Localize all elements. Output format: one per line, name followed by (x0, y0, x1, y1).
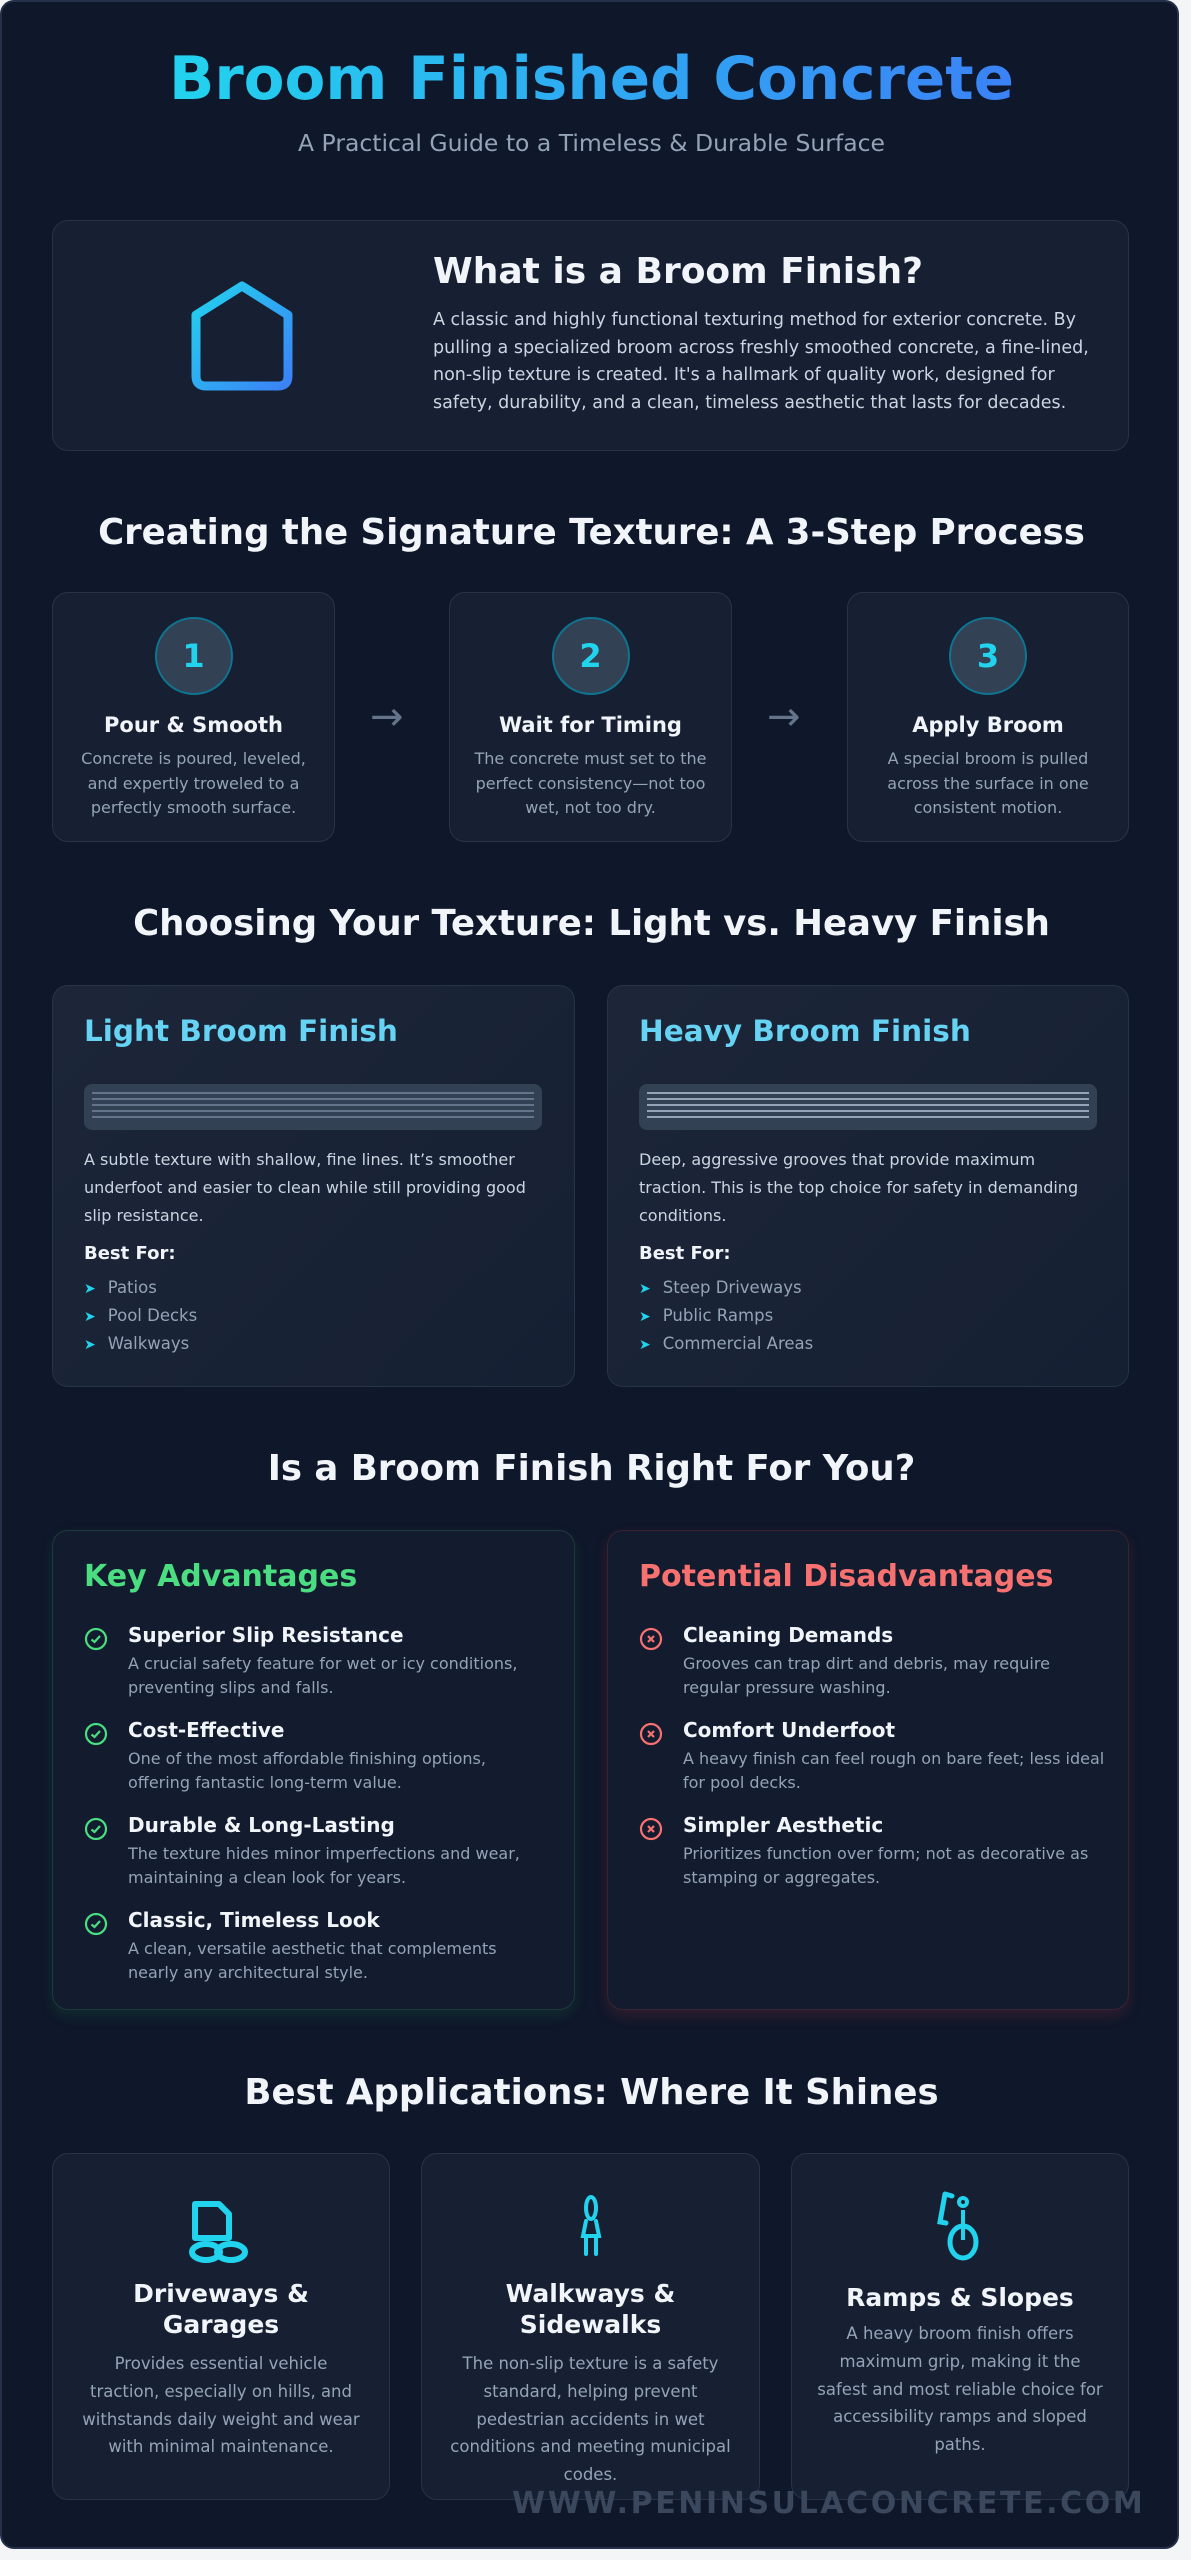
panel: light: ➤ Patios (84, 1278, 157, 1297)
panel: disadvantages: Cleaning Demands (683, 1623, 893, 1647)
panel: disadvantages: Prioritizes function over form; not as decorative as stamping or aggregates. (683, 1844, 1088, 1886)
app: walkways (421, 2153, 760, 2500)
panel: light: Best For: (84, 1243, 176, 1264)
panel: what is (52, 220, 1129, 451)
panel: disadvantages: A heavy finish can feel rough on bare feet; less ideal for pool decks. (683, 1749, 1104, 1792)
panel: advantages (52, 1530, 575, 2010)
icon: house (192, 281, 292, 390)
panel: advantages: Key Advantages (84, 1559, 357, 1594)
app: walkways: The non-slip texture is a safety standard, helping prevent pedestrian accidents in wet conditions and meeting municipal codes. (450, 2354, 731, 2484)
panel: light: ➤ Walkways (84, 1334, 189, 1353)
app: driveways (52, 2153, 390, 2500)
step 3: Apply Broom (912, 713, 1064, 737)
panel: heavy: Heavy Broom Finish (639, 1014, 971, 1048)
panel: advantages: Classic, Timeless Look (128, 1908, 380, 1932)
panel: heavy: ➤ Public Ramps (639, 1306, 773, 1325)
panel: light: ➤ Pool Decks (84, 1306, 197, 1325)
arrow: → (370, 694, 404, 740)
step 3 (847, 592, 1129, 842)
panel: heavy: ➤ Steep Driveways (639, 1278, 802, 1297)
app: ramps: A heavy broom finish offers maximum grip, making it the safest and most reliable choice for accessibility ramps and sloped paths. (817, 2324, 1103, 2454)
panel: disadvantages: Grooves can trap dirt and debris, may require regular pressure washing. (683, 1654, 1050, 1696)
app: ramps: Ramps & Slopes (846, 2283, 1074, 2312)
icon: wheelchair (937, 2192, 978, 2260)
heading: What is a Broom Finish? (433, 251, 923, 292)
heading: applications: Best Applications: Where It Shines (244, 2072, 939, 2113)
app: walkways: Sidewalks (520, 2310, 661, 2339)
step 2: 2 (579, 637, 602, 675)
step 3: 3 (977, 637, 999, 675)
app: ramps (791, 2153, 1129, 2500)
step 1: Pour & Smooth (104, 713, 283, 737)
panel: advantages: Cost-Effective (128, 1718, 284, 1742)
app: driveways: Provides essential vehicle traction, especially on hills, and withstands daily weight and wear with minimal maintenance. (82, 2354, 360, 2456)
panel: advantages: Superior Slip Resistance (128, 1623, 404, 1647)
arrow: → (767, 694, 801, 740)
step 1: 1 (182, 637, 205, 675)
heading: right for you: Is a Broom Finish Right For You? (268, 1448, 915, 1489)
step 2: Wait for Timing (499, 713, 682, 737)
text: A classic and highly functional texturing method for exterior concrete. By pulling a specialized broom across freshly smoothed concrete, a fine-lined, non-slip texture is created. It's a hallmark of quality work, designed for safety, durability, and a clean, timeless aesthetic that lasts for decades. (433, 310, 1089, 413)
panel: heavy: ➤ Commercial Areas (639, 1334, 813, 1353)
panel: heavy: Deep, aggressive grooves that provide maximum traction. This is the top choice for safety in demanding conditions. (639, 1150, 1078, 1225)
panel: advantages: One of the most affordable finishing options, offering fantastic long-term value. (128, 1749, 486, 1792)
step 1 (52, 592, 335, 842)
heading: texture: Choosing Your Texture: Light vs. Heavy Finish (133, 903, 1050, 944)
panel: disadvantages: Comfort Underfoot (683, 1718, 895, 1742)
icon: car (189, 2201, 248, 2263)
title: Broom Finished Concrete (169, 45, 1014, 114)
panel: advantages: The texture hides minor imperfections and wear, maintaining a clean look for years. (128, 1844, 520, 1886)
app: driveways: Garages (163, 2310, 279, 2339)
step 2: The concrete must set to the perfect consistency—not too wet, not too dry. (474, 749, 706, 817)
panel: light: Light Broom Finish (84, 1014, 398, 1048)
icon: person (580, 2195, 602, 2256)
step 2 (449, 592, 732, 842)
panel: advantages: A clean, versatile aesthetic that complements nearly any architectural style. (128, 1939, 497, 1982)
watermark: WWW.PENINSULACONCRETE.COM (512, 2486, 1145, 2521)
panel: heavy: Best For: (639, 1243, 731, 1264)
panel: advantages: A crucial safety feature for wet or icy conditions, preventing slips and falls. (128, 1654, 517, 1696)
subtitle: A Practical Guide to a Timeless & Durable Surface (298, 129, 885, 157)
panel: light (52, 985, 575, 1387)
panel: disadvantages (607, 1530, 1129, 2010)
step 3: A special broom is pulled across the surface in one consistent motion. (887, 749, 1089, 817)
panel: heavy (607, 985, 1129, 1387)
panel: advantages: Durable & Long-Lasting (128, 1813, 395, 1837)
app: driveways: Driveways & (133, 2279, 309, 2308)
heading: process: Creating the Signature Texture: A 3-Step Process (98, 512, 1085, 553)
panel: disadvantages: Simpler Aesthetic (683, 1813, 883, 1837)
app: walkways: Walkways & (506, 2279, 675, 2308)
panel: disadvantages: Potential Disadvantages (639, 1559, 1053, 1594)
step 1: Concrete is poured, leveled, and expertly troweled to a perfectly smooth surface. (81, 749, 306, 817)
panel: light: A subtle texture with shallow, fine lines. It’s smoother underfoot and easier to clean while still providing good slip resistance. (84, 1150, 526, 1225)
